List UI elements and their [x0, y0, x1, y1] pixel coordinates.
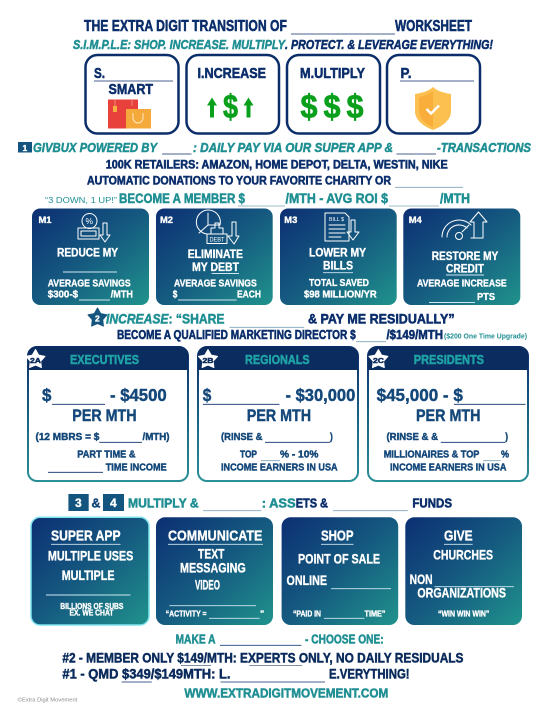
panel: multiply: M.ULTIPLY [300, 65, 365, 82]
make a choice line [176, 631, 384, 646]
member line [45, 191, 470, 206]
panel: increase [186, 55, 279, 134]
card: communicate: ” [260, 609, 264, 619]
icon: shopping bags [108, 99, 151, 128]
panel: 2B regionals: $ [203, 385, 212, 405]
panel: 2C presidents: INCOME EARNERS IN USA [390, 461, 507, 473]
section 3 and 4 heading: MULTIPLY & [128, 496, 199, 511]
panel: multiply [287, 55, 380, 134]
card: M4 restore credit: PTS [477, 291, 495, 303]
option 2: #2 - MEMBER ONLY $149/MTH: EXPERTS ONLY, NO DAILY RESIDUALS [62, 650, 464, 666]
member line: BECOME A MEMBER $ [119, 191, 245, 206]
icon: shield [415, 87, 451, 130]
panel: S smart: S. [94, 65, 105, 82]
subtitle: . PROTECT. & LEVERAGE EVERYTHING! [285, 37, 494, 52]
badge 4 [103, 494, 124, 511]
icon: percent and banknote: % [86, 216, 94, 226]
website: WWW.EXTRADIGITMOVEMENT.COM [184, 686, 388, 701]
panel: 2B regionals: - $30,000 [286, 385, 356, 405]
badge 1 [18, 142, 32, 153]
badge 2B: 2B [202, 356, 214, 365]
card: M2 eliminate debt: AVERAGE SAVINGS [174, 278, 257, 290]
card: communicate: TEXT [198, 546, 225, 562]
card: M2 eliminate debt: EACH [237, 288, 261, 300]
icon: pie and debt: DEBT [210, 238, 225, 244]
card: shop [282, 517, 398, 625]
card: super app: MULTIPLE [62, 567, 114, 583]
badge 2C: 2C [373, 356, 385, 365]
section 2 heading: & PAY ME RESIDUALLY” [308, 310, 455, 326]
card: M3 lower bills [280, 208, 397, 305]
section 2 heading [88, 308, 455, 327]
card: M4 restore credit: M4 [409, 215, 422, 226]
panel: S smart [86, 55, 178, 134]
panel: protect: P. [400, 65, 412, 82]
card: shop: TIME” [364, 609, 386, 619]
panel: 2B regionals: REGIONALS [245, 353, 310, 367]
section 1 heading [18, 140, 531, 155]
card: M4 restore credit [403, 208, 520, 305]
badge 1: 1 [22, 143, 28, 153]
badge 2 star: 2 [95, 314, 100, 324]
section 2 heading: INCREASE [106, 310, 169, 326]
icon: bill document: BILL $ [329, 217, 344, 223]
panel: 2C presidents: ) [505, 431, 508, 443]
badge 2A: 2A [30, 356, 42, 365]
card: super app [31, 517, 149, 625]
panel: 2C presidents: PRESIDENTS [414, 353, 484, 367]
icon: three dollars: $ [300, 88, 318, 125]
icon: arrows and dollar: $ [223, 88, 238, 125]
card: communicate: COMMUNICATE [168, 528, 262, 545]
card: super app: BILLIONS OF SUBS [60, 602, 124, 611]
panel: 2A executives [26, 347, 188, 481]
card: shop: POINT OF SALE [298, 550, 380, 566]
card: communicate: MESSAGING [180, 559, 246, 575]
panel: 2B regionals: PER MTH [247, 406, 311, 425]
director line: BECOME A QUALIFIED MARKETING DIRECTOR $ [117, 328, 356, 342]
make a choice line: - CHOOSE ONE: [305, 631, 384, 646]
section 1 heading: : DAILY PAY VIA OUR SUPER APP & [193, 140, 393, 155]
badge 3 [68, 494, 89, 511]
card: M2 eliminate debt [156, 208, 273, 305]
panel: 2B regionals: % - 10% [280, 449, 319, 461]
panel: 2A executives: /MTH) [142, 431, 170, 443]
donations line: AUTOMATIC DONATIONS TO YOUR FAVORITE CHARITY OR [87, 173, 391, 187]
panel: 2B regionals [198, 347, 358, 481]
panel: protect [387, 55, 480, 134]
member line: “3 DOWN, 1 UP!” [45, 195, 117, 205]
section 3 and 4 heading: ETS & [296, 496, 328, 511]
member line: /MTH [440, 191, 470, 206]
panel: 2C presidents: % [501, 449, 510, 461]
section 3 and 4 heading: & [92, 496, 100, 511]
director line: /$149/MTH [386, 328, 443, 342]
make a choice line: MAKE A [176, 631, 216, 646]
card: M3 lower bills: TOTAL SAVED [309, 277, 369, 289]
subtitle [73, 37, 494, 52]
panel: 2C presidents: (RINSE & & [386, 431, 438, 443]
member line: /MTH - AVG ROI $ [286, 191, 388, 206]
card: M2 eliminate debt: ELIMINATE [188, 249, 243, 261]
panel: 2A executives: PER MTH [72, 406, 136, 425]
panel: 2C presidents [368, 347, 528, 481]
option 1: E.VERYTHING! [329, 666, 410, 682]
panel: 2A executives: $ [42, 385, 52, 405]
subtitle: S.I.M.P.L.E: SHOP. INCREASE. MULTIPLY [73, 37, 286, 52]
section 3 and 4 heading [68, 494, 452, 511]
panel: 2B regionals: (RINSE & [221, 431, 263, 443]
director line: ($200 One Time Upgrade) [444, 333, 527, 340]
option 1: #1 - QMD $349/$149MTH: L. [62, 666, 231, 682]
card: M1 reduce: AVERAGE SAVINGS [48, 278, 131, 290]
card: M4 restore credit: CREDIT [446, 264, 484, 276]
card: communicate: “ACTIVITY = [166, 609, 207, 619]
card: super app: SUPER APP [51, 528, 121, 545]
card: M1 reduce [32, 208, 149, 305]
badge 3: 3 [75, 496, 82, 510]
section 2 heading: : “SHARE [168, 310, 224, 326]
card: M1 reduce: /MTH [111, 288, 133, 300]
card: M1 reduce: $300-$ [48, 288, 78, 300]
card: M1 reduce: M1 [38, 215, 52, 226]
card: communicate: VIDEO [195, 576, 220, 592]
card: give: ORGANIZATIONS [417, 585, 506, 601]
option 1 [62, 666, 410, 682]
badge 2A [26, 350, 45, 368]
title: THE EXTRA DIGIT TRANSITION OF [84, 18, 287, 35]
panel: 2A executives: (12 MBRS = $ [36, 431, 99, 443]
panel: 2A executives: TIME INCOME [106, 461, 167, 473]
icon: credit gauge [442, 212, 487, 240]
card: M3 lower bills: $98 MILLION/YR [304, 289, 377, 301]
panel: increase: I.NCREASE [198, 65, 266, 82]
copyright: ©Extra Digit Movement [18, 696, 78, 703]
card: give: CHURCHES [433, 546, 493, 562]
card: give [405, 517, 522, 625]
section 3 and 4 heading: FUNDS [412, 496, 452, 511]
card: M2 eliminate debt: MY DEBT [192, 262, 239, 274]
icon: three dollars [300, 88, 364, 125]
card: shop: SHOP [321, 528, 354, 545]
panel: 2B regionals: ) [330, 431, 333, 443]
title: WORKSHEET [395, 18, 472, 35]
section 1 heading: GIVBUX POWERED BY [33, 140, 158, 155]
card: M1 reduce: REDUCE MY [57, 248, 118, 260]
card: M4 restore credit: AVERAGE INCREASE [417, 278, 507, 290]
card: shop: ONLINE [286, 572, 327, 588]
badge 2B [198, 350, 218, 368]
panel: 2C presidents: $45,000 - $ [377, 385, 463, 405]
card: communicate [156, 517, 273, 625]
card: M4 restore credit: RESTORE MY [432, 251, 499, 263]
panel: 2A executives: PART TIME & [77, 449, 136, 461]
card: super app: EX. WE CHAT [70, 609, 114, 618]
card: M2 eliminate debt: $ [173, 288, 177, 300]
card: M3 lower bills: LOWER MY [309, 248, 366, 260]
card: give: GIVE [444, 528, 473, 545]
panel: 2B regionals: INCOME EARNERS IN USA [221, 461, 338, 473]
card: M3 lower bills: M3 [284, 215, 297, 226]
title [84, 18, 472, 35]
card: shop: “PAID IN [293, 609, 321, 619]
panel: 2B regionals: TOP [240, 449, 257, 461]
card: super app: MULTIPLE USES [48, 548, 133, 564]
panel: 2C presidents: PER MTH [416, 406, 480, 425]
card: M2 eliminate debt: M2 [160, 215, 173, 226]
panel: 2C presidents: MILLIONAIRES & TOP [384, 449, 479, 461]
card: M3 lower bills: BILLS [323, 260, 353, 272]
badge 4: 4 [110, 496, 117, 510]
badge 2 star [88, 308, 107, 326]
panel: 2A executives: EXECUTIVES [70, 353, 139, 367]
section 3 and 4 heading: : ASS [262, 496, 296, 511]
icon: three dollars: $ [324, 88, 340, 125]
panel: S smart: SMART [108, 81, 153, 98]
card: give: “WIN WIN WIN” [438, 609, 489, 619]
icon: three dollars: $ [346, 88, 364, 125]
card: give: NON [410, 571, 433, 587]
retailers line: 100K RETAILERS: AMAZON, HOME DEPOT, DELTA, WESTIN, NIKE [106, 158, 448, 172]
badge 2C [369, 350, 388, 368]
section 1 heading: -TRANSACTIONS [437, 140, 531, 155]
panel: 2A executives: - $4500 [110, 385, 167, 405]
